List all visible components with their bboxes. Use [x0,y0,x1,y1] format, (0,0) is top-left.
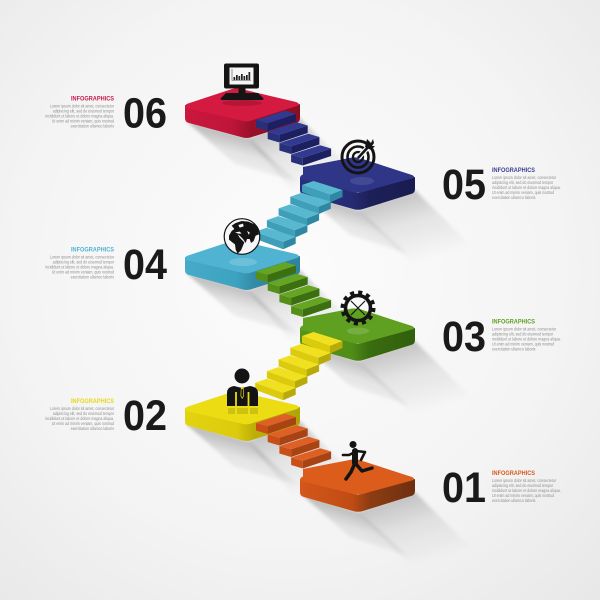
platform 03: green [300,308,415,361]
text block 06 [45,96,115,129]
text block 03: adipiscing elit, sed do eiusmod tempor [492,331,554,337]
text block 06: Lorem ipsum dolor sit amet, consectetur [50,103,115,109]
platform 02: yellow [185,392,300,441]
text block 03: Ut enim ad minim veniam, quis nostrud [492,341,554,347]
icon: target with arrow [342,139,375,185]
text block 05: Ut enim ad minim veniam, quis nostrud [492,190,554,195]
stairs: yellow 03 to 02 [255,332,342,400]
text block 05: INFOGRAPHICS [492,167,535,174]
stairs: green 04 to 03 [256,262,331,317]
text block 02: exercitation ullamco laboris [71,426,114,431]
text block 01: Lorem ipsum dolor sit amet, consectetur [492,478,557,483]
stairs: navy 06 to 05 [256,111,331,166]
text block 03: INFOGRAPHICS [492,318,535,326]
text block 04: Ut enim ad minim veniam, quis nostrud [52,269,114,275]
text block 04: incididunt ut labore et dolore magna aliqua. [45,264,114,270]
icon: monitor with chart [220,64,264,106]
icon: running person [343,441,372,479]
icon: businessman [227,368,258,414]
text block 04: exercitation ullamco laboris [71,274,114,280]
stairs: teal 05 to 04 [255,181,342,249]
text block 02: Lorem ipsum dolor sit amet, consectetur [50,406,115,411]
text block 01: INFOGRAPHICS [492,470,535,477]
text block 06: exercitation ullamco laboris [71,123,114,129]
platform 05: navy [300,157,415,210]
icon: globe [224,219,260,266]
text block 05: exercitation ullamco laboris [492,195,535,200]
number 04: 04 [123,241,167,289]
text block 02: adipiscing elit, sed do eiusmod tempor [53,411,115,416]
number 05: 05 [442,161,486,209]
text block 04: INFOGRAPHICS [71,246,114,254]
text block 04: Lorem ipsum dolor sit amet, consectetur [50,254,115,260]
platform 01: orange [300,459,415,512]
text block 06: incididunt ut labore et dolore magna aliqua. [45,113,114,119]
text block 05 [492,167,561,200]
text block 03: exercitation ullamco laboris [492,346,535,352]
text block 06: adipiscing elit, sed do eiusmod tempor [53,108,115,114]
text block 03 [492,318,561,352]
text block 02: INFOGRAPHICS [71,398,114,405]
number 01: 01 [442,464,486,512]
platform 04: teal [185,240,300,290]
text block 01: adipiscing elit, sed do eiusmod tempor [492,483,554,488]
text block 04: adipiscing elit, sed do eiusmod tempor [53,259,115,265]
text block 04 [45,246,115,280]
text block 03: Lorem ipsum dolor sit amet, consectetur [492,326,557,332]
text block 01: Ut enim ad minim veniam, quis nostrud [492,493,554,498]
number 03: 03 [442,313,486,361]
text block 06: INFOGRAPHICS [71,96,114,102]
text block 05: Lorem ipsum dolor sit amet, consectetur [492,175,557,180]
text block 01 [492,470,561,503]
text block 01: exercitation ullamco laboris [492,498,535,503]
stairs: orange 02 to 01 [256,414,331,468]
long shadows [185,118,475,572]
text block 05: adipiscing elit, sed do eiusmod tempor [492,180,554,185]
text block 03: incididunt ut labore et dolore magna aliqua. [492,336,561,342]
number 02: 02 [123,392,167,440]
text block 02: incididunt ut labore et dolore magna aliqua. [45,416,114,421]
text block 06: Ut enim ad minim veniam, quis nostrud [52,118,114,124]
text block 02: Ut enim ad minim veniam, quis nostrud [52,421,114,426]
platform 06: red [185,88,300,138]
icon: gear [342,292,374,334]
text block 02 [45,398,115,431]
text block 01: incididunt ut labore et dolore magna aliqua. [492,488,561,493]
number 06: 06 [123,90,167,138]
text block 05: incididunt ut labore et dolore magna aliqua. [492,185,561,190]
